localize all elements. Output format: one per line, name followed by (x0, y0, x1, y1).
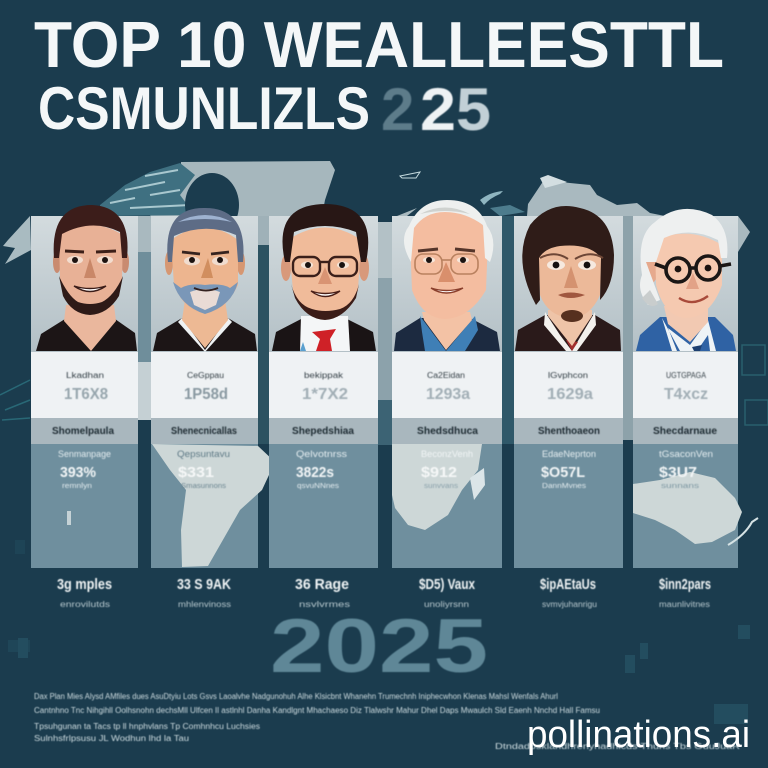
stat 4: unoliyrsnn (424, 600, 469, 609)
panel: person 1 (31, 205, 138, 568)
faded year: 5 (456, 76, 491, 143)
card 1 text: Shomelpaula (52, 426, 114, 437)
footer text: Sulnhsfrlpsusu JL Wodhun lhd la Tau (34, 734, 189, 743)
card 1 text: Senmanpage (58, 449, 111, 459)
stat 1: enrovilutds (60, 600, 110, 609)
card 1 text: remnlyn (62, 483, 92, 490)
stat 5: svmvjuhanrigu (542, 600, 597, 609)
card 4 text: Shedsdhuca (417, 426, 478, 437)
stat 6 (659, 576, 711, 609)
footer line 1: Dax Plan Mies Alysd AMfiles dues AsuDtyiu Lots Gsvs Laoalvhe Nadgunohuh Alhe Klsicbnt Whanehn Trumechnh Iniphecwhon Klenas Mahsl Wenfals Ahurl (34, 692, 558, 701)
stat 6: maunlivitnes (659, 600, 710, 609)
card 5 text: Shenthoaeon (538, 426, 600, 437)
map: south america (152, 444, 275, 567)
stat 2: mhlenvinoss (178, 600, 231, 609)
card 3 text: Qelvotnrss (296, 449, 348, 459)
card 5 text: $O57L (541, 464, 585, 481)
card 3 text: bekippak (304, 371, 344, 380)
card 1 text: 1T6X8 (64, 386, 108, 403)
stat 4: $D5) Vaux (419, 576, 476, 593)
footer text: Dtndadosklandhrenyhadhicds Thuns Tbs GuuJuaR (495, 742, 740, 751)
map: africa (392, 444, 482, 530)
title line 1: TOP 10 WEALLEESTTL (34, 8, 724, 81)
stat 3 (295, 576, 350, 609)
card 2 text: Qepsuntavu (177, 449, 230, 459)
big year 2025: 2025 (270, 604, 488, 689)
card 2 text: CeGppau (187, 371, 224, 380)
card 4 text (417, 371, 478, 490)
footer text: Cantnhno Tnc Nihgihll Oolhsnohn dechsMll Ulfcen Il astlnhl Danha Kandlgnt Mhachaeso Diz Tlalwshr Mahur Dhel Daps Mwaulch Sld Eaenh Nnchd Hall Famsu (34, 706, 600, 715)
stat 3: nsvlvrmes (299, 600, 350, 609)
card 2 text: $331 (178, 464, 214, 481)
stat 3: 36 Rage (295, 576, 349, 593)
watermark: pollinations.ai (527, 714, 750, 756)
title (34, 8, 724, 143)
card 6 text: Shecdarnaue (653, 426, 717, 437)
portrait 6 (636, 209, 736, 351)
card 4 text: BeconzVenh (421, 449, 473, 459)
stat 1: 3g mples (57, 576, 112, 593)
stat 1 (57, 576, 112, 609)
card 4 text: $912 (421, 464, 457, 481)
card 1 text (52, 371, 114, 490)
card 6 text (653, 371, 717, 490)
card 2 text: Shenecnicallas (171, 426, 237, 437)
card 5 text: 1629a (547, 386, 593, 403)
card 5 text: EdaeNeprton (542, 449, 596, 459)
world map background (0, 161, 768, 445)
portrait 3 (272, 204, 376, 351)
card 2 text (171, 371, 237, 490)
card 1 text: 393% (60, 464, 96, 481)
portrait 2 (153, 208, 257, 352)
card 4 text: 1293a (426, 386, 470, 403)
map: india (470, 468, 485, 500)
card 4 text: Ca2Eidan (427, 371, 465, 380)
map: coast line (728, 518, 758, 545)
title line 2: CSMUNLIZLS (38, 75, 370, 142)
panel: person 4 (392, 200, 502, 568)
card 2 text: 1P58d (184, 386, 228, 403)
stat 6: $inn2pars (659, 576, 711, 593)
stats below cards (57, 576, 711, 609)
faded year: 2 (420, 76, 456, 143)
card 6 text: $3U7 (659, 464, 697, 481)
portrait 1 (36, 205, 137, 351)
card 3 text (292, 371, 354, 490)
stat 4 (419, 576, 476, 609)
map: australia (633, 472, 742, 544)
card 5 text (538, 371, 600, 490)
footer text: Tpsuhgunan ta Tacs tp ll hnphvlans Tp Comhnhcu Luchsies (34, 722, 260, 731)
card 6 text: T4xcz (664, 386, 708, 403)
stat 2 (177, 576, 231, 609)
card 3 text: Shepedshiaa (292, 426, 354, 437)
panel: person 2 (151, 208, 275, 568)
card 1 text: Lkadhan (66, 371, 104, 380)
portrait 4 (394, 200, 500, 351)
card 6 text: tGsaconVen (659, 449, 713, 459)
panel: person 3 (269, 204, 378, 568)
footer text (34, 692, 740, 751)
card 3 text: 1*7X2 (302, 386, 348, 403)
stat 5: $ipAEtaUs (540, 576, 596, 593)
card 5 text: lGvphcon (548, 371, 588, 380)
portrait 5 (515, 206, 621, 351)
card 2 text: Smasunnons (181, 483, 227, 490)
faded year: 2 (381, 76, 414, 143)
card 3 text: qsvuNNnes (297, 483, 340, 490)
card 4 text: sunvvans (424, 483, 459, 490)
card 3 text: 3822s (296, 464, 334, 481)
stat 2: 33 S 9AK (177, 576, 231, 593)
panel: person 5 (514, 206, 623, 568)
panel: person 6 (633, 209, 758, 568)
faded year (381, 76, 491, 143)
card 6 text: sunnans (661, 483, 700, 490)
stat 5 (540, 576, 597, 609)
decorative marks (8, 540, 750, 724)
card 5 text: DannMvnes (542, 483, 587, 490)
card 6 text: UGTGPAGA (666, 371, 707, 380)
